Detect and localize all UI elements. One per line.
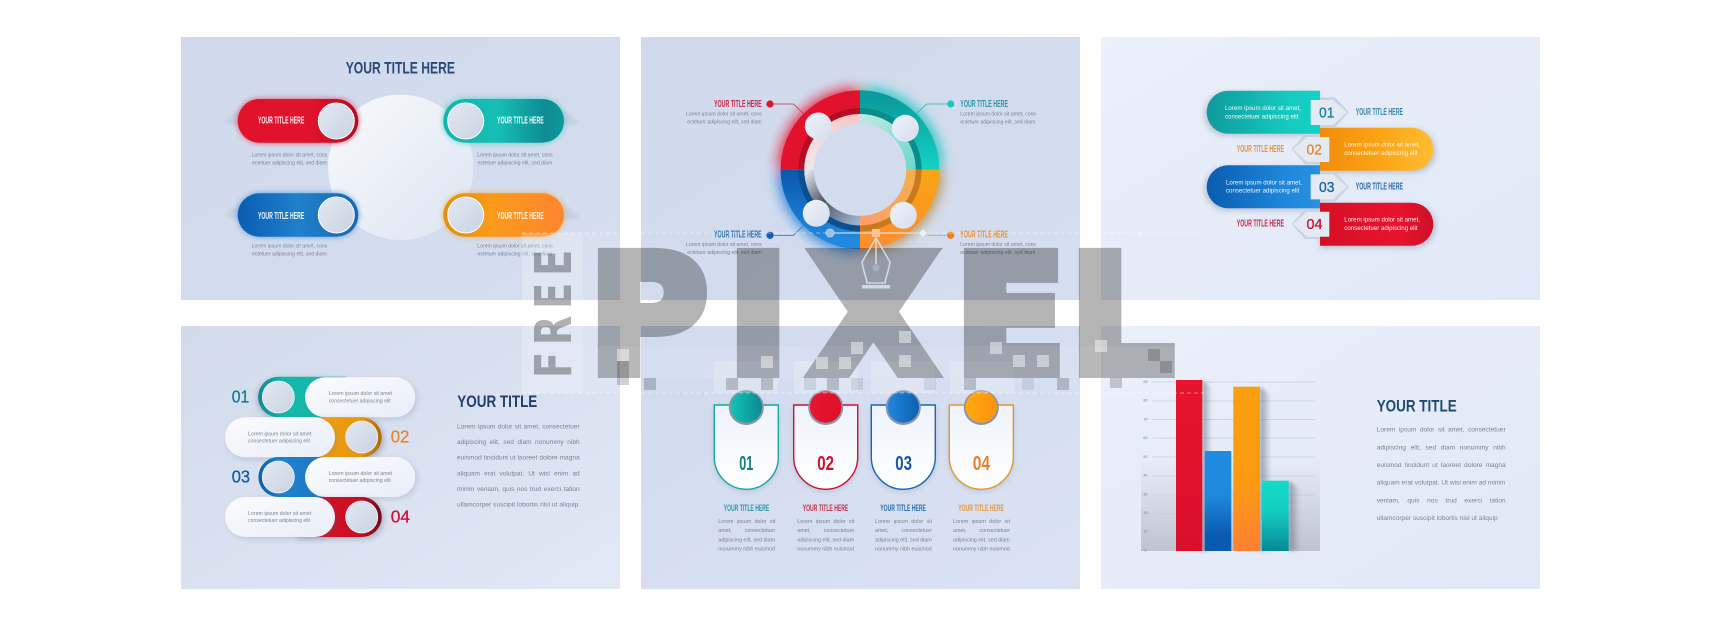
step 02: 02 [391,427,409,447]
body paragraph: veniam, quis nos trud exerci tation [1377,497,1506,504]
badge 01: consectetuer [745,528,776,534]
body paragraph: adipiscing elit, sed diam nonummy nibh [457,439,580,446]
tab 01 teal: consectetuer adipiscing elit [1225,114,1299,121]
callout: bottom left: YOUR TITLE HERE [714,230,762,241]
tab 03 blue: YOUR TITLE HERE [1356,181,1403,192]
caption text: four button captions: ectetuer adipiscing elit, sed diam [252,252,327,258]
badge 01: amet, [718,528,732,534]
callout: top left: Lorem ipsum dolor sit amet, cons [686,112,762,118]
panel: interlocking pills [181,326,620,589]
red button [238,99,358,143]
step 04 [225,497,410,539]
badge 02: nonummy nibh euismod [797,546,854,552]
bar chart: 40 [1143,474,1148,478]
step 04: 04 [391,507,410,527]
step 01: consectetuer adipiscing elit [329,398,391,404]
tab 03 blue: consectetuer adipiscing elit [1226,188,1300,195]
badge 03: nonummy nibh euismod [875,546,932,552]
callout: top right: ectetuer adipiscing elit, sed diam [960,119,1035,125]
teal button [443,99,564,143]
blue button [238,193,358,237]
callout: top right: Lorem ipsum dolor sit amet, cons [960,112,1036,118]
ring node circles [803,112,919,229]
badge 01: Lorem ipsum dolor sit [718,519,776,525]
tab 02 orange: consectetuer adipiscing elit [1344,150,1418,157]
callout: top right: YOUR TITLE HERE [960,99,1008,110]
panel: stacked tabs [1101,37,1540,300]
bar chart: 0 [1144,548,1147,552]
donut ring [790,99,930,240]
tab 01 teal [1207,91,1403,134]
tab 01 teal: Lorem ipsum dolor sit amet, [1225,105,1301,112]
badge 03: 03 [895,453,912,475]
bar shadows [1202,380,1300,551]
badge 02 [794,390,858,552]
body paragraph: aliquam erat volutpat. Ut wisi enim ad [457,470,580,477]
body paragraph: minim veniam, quis nos trud exerci tation [457,486,580,493]
body paragraph: Lorem ipsum dolor sit amet, consectetuer [457,423,580,430]
body paragraph [1377,427,1506,522]
panel: four badges [641,326,1080,589]
badge 02: 02 [817,453,834,475]
step 03: Lorem ipsum dolor sit amet [329,471,393,477]
badge 01: 01 [739,453,753,475]
bar chart: 80 [1143,399,1148,403]
step 03: 03 [232,467,250,487]
ring centre disc [814,124,906,216]
step 01: Lorem ipsum dolor sit amet [329,391,393,397]
badge 04 [949,390,1013,552]
bar chart: 60 [1143,436,1148,440]
callout: bottom right [927,230,1036,256]
badge 01 [714,390,778,552]
ring glow [788,98,932,242]
orange button: YOUR TITLE HERE [497,211,544,222]
badge 01: YOUR TITLE HERE [724,503,769,514]
body paragraph [457,423,580,509]
heading: your title: YOUR TITLE [457,393,537,411]
tab 03 blue: 03 [1319,180,1334,196]
badge 03: YOUR TITLE HERE [880,503,926,514]
tab 04 red: Lorem ipsum dolor sit amet, [1344,217,1420,224]
tab 04 red: consectetuer adipiscing elit [1344,225,1418,232]
badge 03: adipiscing elit, sed diam [875,537,932,543]
callout: top right [917,99,1036,125]
bar: red [1176,380,1202,551]
heading: panel one title: YOUR TITLE HERE [346,59,455,77]
red button: YOUR TITLE HERE [258,116,304,127]
tab 02 orange [1237,128,1433,171]
step 02: Lorem ipsum dolor sit amet [248,431,312,437]
tab 04 red [1237,203,1433,246]
badge 02: amet, [797,528,811,534]
blue button: YOUR TITLE HERE [258,211,304,222]
tab 03 blue: Lorem ipsum dolor sit amet, [1226,179,1302,186]
callout: bottom left [686,226,803,256]
caption text: four button captions: Lorem ipsum dolor sit amet, cons [252,152,328,158]
body paragraph: euismod tincidunt ut laoreet dolore magna [1377,462,1506,469]
callout: bottom right: ectetuer adipiscing elit, sed diam [960,250,1035,256]
bar: teal [1262,481,1289,551]
caption text: four button captions: ectetuer adipiscing elit, sed diam [252,160,327,166]
step 03 [232,457,417,499]
body paragraph: ullamcorper suscipit lobortis nisl ut aliquip [457,502,579,509]
step 02 [225,417,409,460]
body paragraph: adipiscing elit, sed diam nonummy nibh [1377,444,1506,451]
central white circle [328,95,473,240]
tab 02 orange: Lorem ipsum dolor sit amet, [1344,142,1420,149]
panel: round buttons [181,37,620,300]
panel: bar chart [1101,326,1540,589]
bar: blue [1205,451,1231,551]
icon: pen tool nib [826,229,927,288]
watermark word: PIXEL: PIXEL [589,223,1173,411]
caption text: four button captions: Lorem ipsum dolor sit amet, cons [252,244,328,250]
tab 04 red: 04 [1306,217,1322,233]
step 01 [232,377,417,420]
callout: bottom left: ectetuer adipiscing elit, sed diam [687,250,762,256]
step 04: consectetuer adipiscing elit [248,518,311,524]
panel: ring diagram [641,37,1080,300]
heading: your title: YOUR TITLE [1377,398,1457,416]
tab 02 orange: YOUR TITLE HERE [1237,144,1284,155]
bar chart: 30 [1143,492,1148,496]
badge 03: Lorem ipsum dolor sit [875,519,932,525]
step 02: consectetuer adipiscing elit [248,438,311,444]
badge 01: nonummy nibh euismod [718,546,775,552]
badge 01: adipiscing elit, sed diam [718,537,776,543]
callout: top left: ectetuer adipiscing elit, sed diam [687,119,762,125]
callout: bottom right: Lorem ipsum dolor sit amet, cons [960,242,1036,248]
body paragraph: ullamcorper suscipit lobortis nisl ut aliquip [1377,515,1498,522]
step 01: 01 [232,387,249,407]
bar chart: 90 [1143,380,1148,384]
watermark: Free Pixel [522,223,1204,411]
badge 02: consectetuer [824,528,855,534]
tab 01 teal: 01 [1319,106,1334,122]
badge 03: amet, [875,528,888,534]
callout: top left: YOUR TITLE HERE [714,99,762,110]
bar chart [1141,380,1320,552]
caption text: four button captions: Lorem ipsum dolor sit amet, cons [477,244,553,250]
bar chart: 50 [1143,455,1148,459]
body paragraph: Lorem ipsum dolor sit amet, consectetuer [1377,427,1506,434]
body paragraph: euismod tincidunt ut laoreet dolore magna [457,455,580,462]
button side shadows [224,108,580,220]
badge 02: Lorem ipsum dolor sit [797,519,855,525]
tab 02 orange: 02 [1306,142,1322,158]
bar chart: 10 [1143,530,1148,534]
tab 04 red: YOUR TITLE HERE [1237,219,1284,230]
callout: bottom right: YOUR TITLE HERE [960,230,1008,241]
caption text: four button captions [252,152,553,258]
bar chart: 70 [1143,417,1148,421]
caption text: four button captions: Lorem ipsum dolor sit amet, cons [477,152,553,158]
badge 04: 04 [973,453,991,475]
badge 03 [871,390,935,552]
caption text: four button captions: ectetuer adipiscing elit, sed diam [478,252,552,258]
tab 01 teal: YOUR TITLE HERE [1356,107,1403,118]
badge 02: adipiscing elit, sed diam [797,537,855,543]
caption text: four button captions: ectetuer adipiscing elit, sed diam [478,160,552,166]
badge 04: adipiscing elit, sed diam [953,537,1010,543]
callout: bottom left: Lorem ipsum dolor sit amet, cons [686,242,762,248]
callout: top left [686,99,803,125]
badge 04: consectetuer [979,528,1010,534]
body paragraph: aliquam erat volutpat. Ut wisi enim ad minim [1377,480,1506,487]
badge 04: YOUR TITLE HERE [958,503,1004,514]
bar chart: 20 [1143,511,1148,515]
tab 03 blue [1207,165,1403,208]
badge 04: nonummy nibh euismod [953,546,1010,552]
watermark word: FREE: FREE [523,250,583,378]
badge 04: Lorem ipsum dolor sit [953,519,1010,525]
bar: orange [1233,387,1260,551]
step 04: Lorem ipsum dolor sit amet [248,511,312,517]
pixel fragments [598,331,1178,390]
badge 03: consectetuer [901,528,932,534]
step 03: consectetuer adipiscing elit [329,478,391,484]
orange button [443,193,564,237]
badge 04: amet, [953,528,966,534]
tab shadows [1204,93,1436,248]
teal button: YOUR TITLE HERE [497,116,544,127]
badge 02: YOUR TITLE HERE [803,503,848,514]
